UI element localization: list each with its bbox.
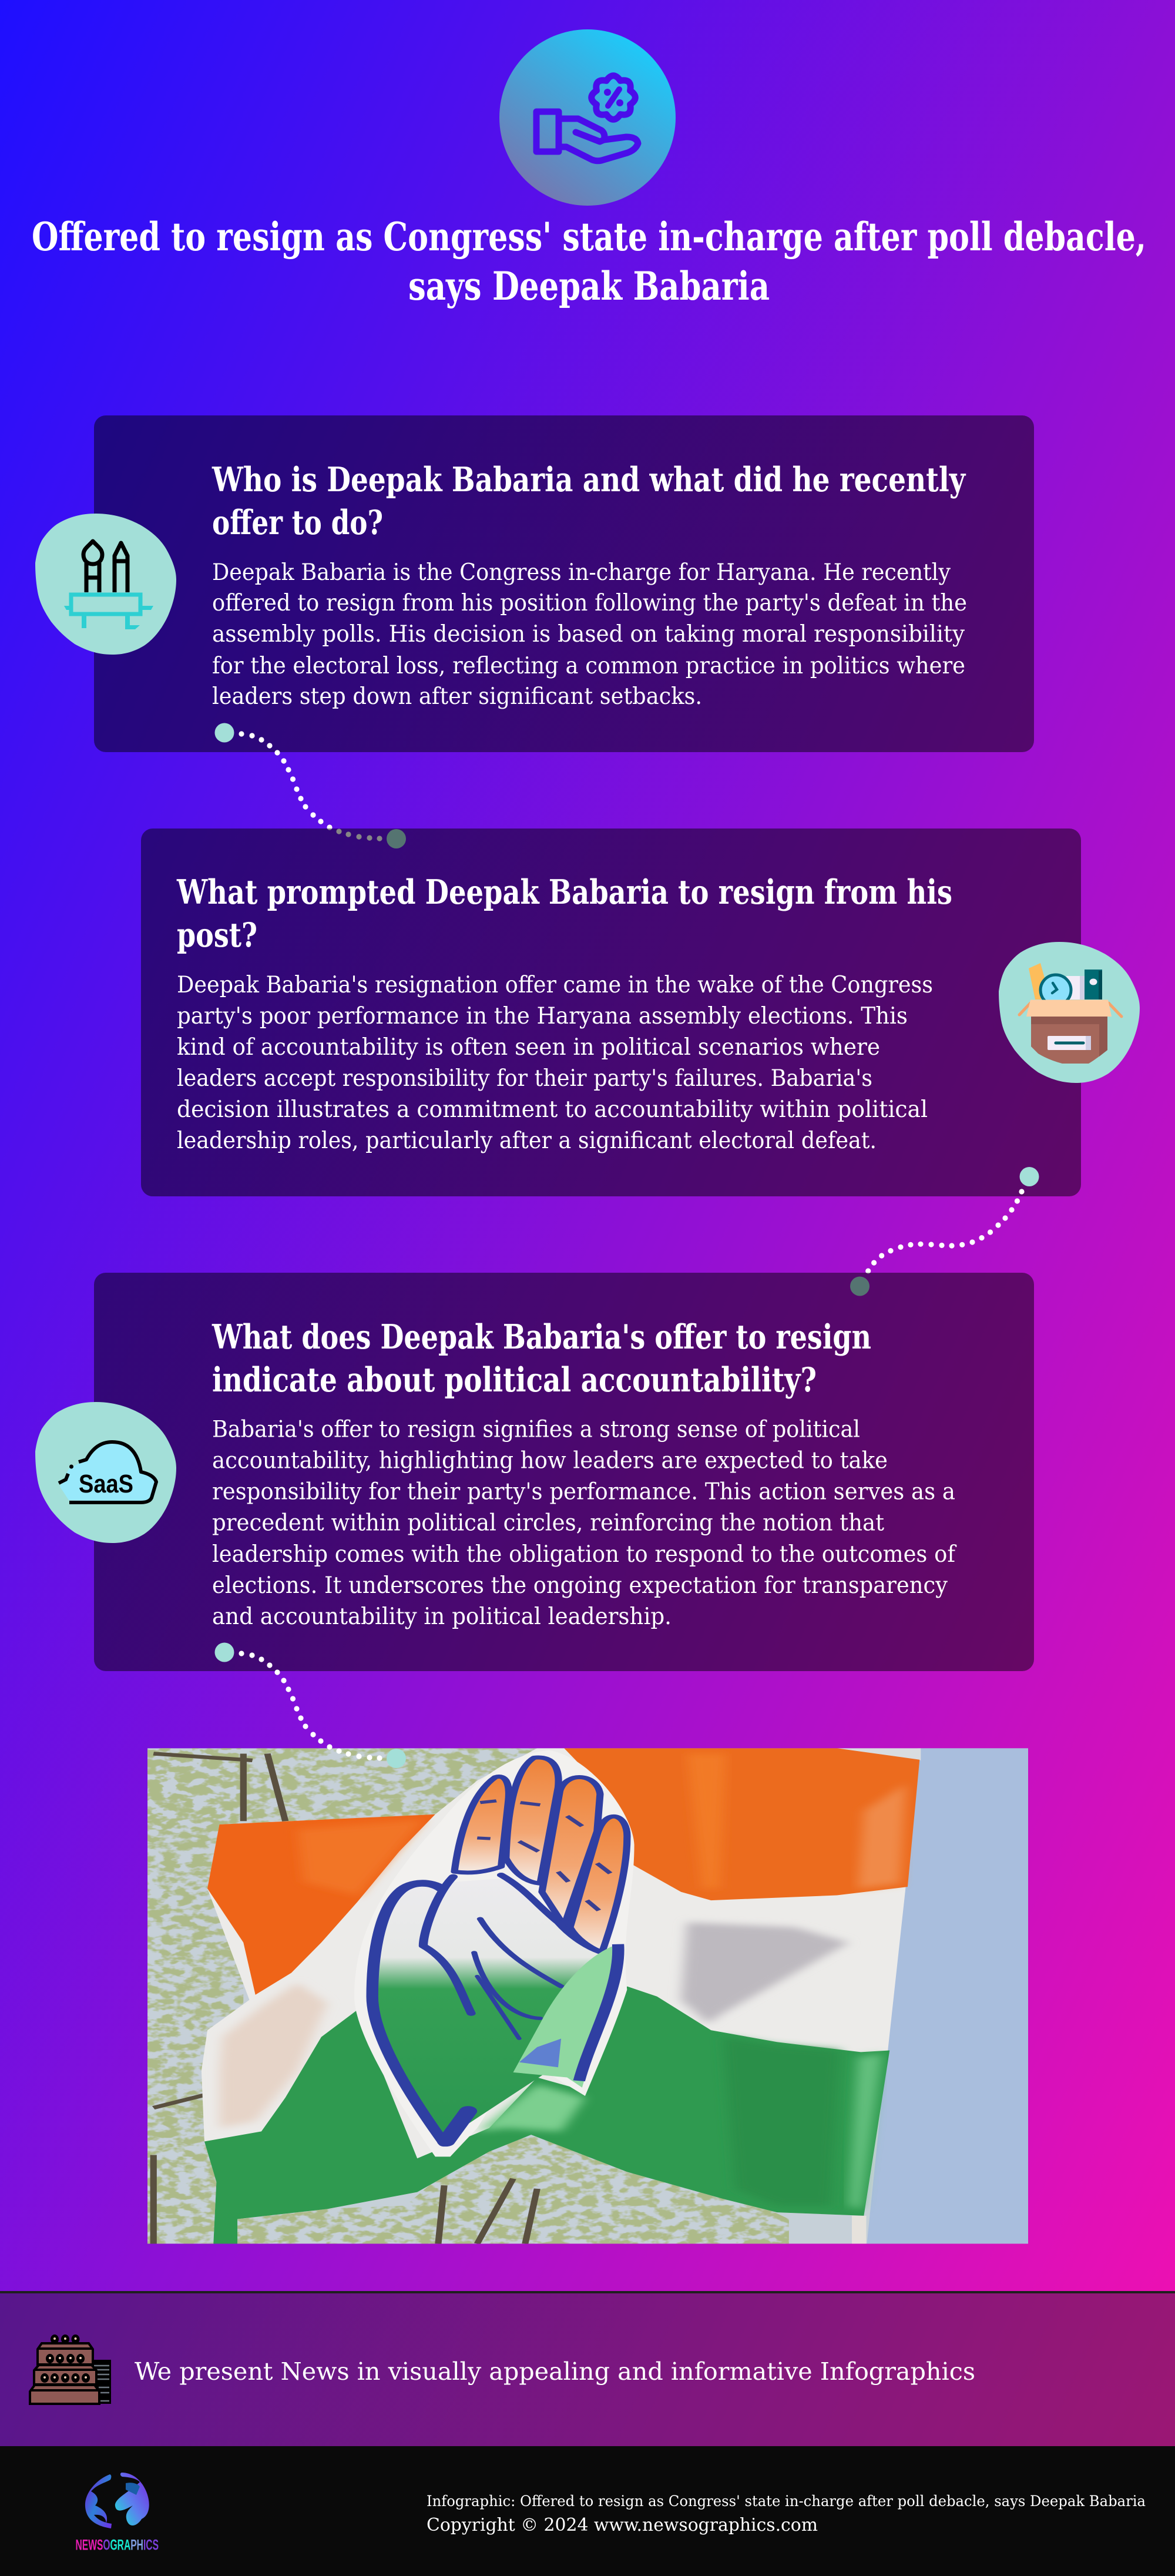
- connector: card 3 to photo: [215, 1643, 406, 1768]
- card 1 background: [94, 415, 1034, 752]
- card 1 heading: Who is Deepak Babaria and what did he recently: [212, 460, 966, 499]
- card 3 heading: What does Deepak Babaria's offer to resign: [212, 1317, 871, 1357]
- panel: what prompted the resignation: [141, 829, 1081, 1196]
- tagline banner: [0, 2291, 1175, 2446]
- card 1 body text: leaders step down after significant setbacks.: [212, 683, 702, 710]
- card 2 heading: What prompted Deepak Babaria to resign from his: [176, 873, 952, 912]
- card 1 heading: offer to do?: [212, 503, 383, 542]
- copyright text: Copyright © 2024 www.newsographics.com: [427, 2515, 818, 2535]
- icon: paint brush and pencil on stand: [35, 514, 176, 655]
- card 2 body text: leaders accept responsibility for their party's failures. Babaria's: [177, 1065, 872, 1092]
- flag white band: [202, 1748, 919, 2243]
- card 3 body text: [212, 1416, 957, 1630]
- logo: Newsographics: NEWSOGRAPHICS: [75, 2537, 159, 2554]
- card 2 heading: post?: [177, 915, 257, 955]
- card 2 body text: decision illustrates a commitment to accountability within political: [177, 1096, 928, 1123]
- card 2 body text: [177, 972, 933, 1154]
- tagline text: We present News in visually appealing and informative Infographics: [135, 2357, 975, 2386]
- card 2 body text: party's poor performance in the Haryana assembly elections. This: [177, 1003, 908, 1029]
- panel: who is Deepak Babaria: [94, 415, 1034, 752]
- card 2 heading: [176, 873, 952, 955]
- hand blue outline: [372, 1875, 603, 2143]
- footer: [0, 2446, 1175, 2576]
- card 1 body text: offered to resign from his position following the party's defeat in the: [212, 590, 967, 616]
- card 3 body text: Babaria's offer to resign signifies a strong sense of political: [212, 1416, 860, 1443]
- card 2 body text: Deepak Babaria's resignation offer came in the wake of the Congress: [177, 972, 933, 998]
- card 3 body text: elections. It underscores the ongoing expectation for transparency: [212, 1572, 948, 1599]
- fingers: [454, 1757, 627, 1953]
- wall behind flagpole: [867, 1748, 1028, 2243]
- hand symbol: [354, 1750, 634, 2156]
- card 3 body text: and accountability in political leadership.: [212, 1604, 672, 1630]
- card 3 background: [94, 1273, 1034, 1671]
- card 3 body text: precedent within political circles, reinforcing the notion that: [212, 1510, 884, 1536]
- icon: open box with clock and binder: [999, 942, 1140, 1083]
- title: says Deepak Babaria: [408, 263, 770, 309]
- card 3 heading: [212, 1317, 871, 1400]
- flag orange band: [564, 1748, 919, 1900]
- card 1 body text: Deepak Babaria is the Congress in-charge for Haryana. He recently: [212, 559, 951, 586]
- card 2 body text: leadership roles, particularly after a significant electoral defeat.: [177, 1128, 877, 1154]
- logo: Newsographics: [75, 2473, 159, 2554]
- card 1 body text: [212, 559, 967, 710]
- connector: card 1 to card 2: [215, 723, 406, 848]
- header icon: hand with discount badge: [499, 29, 676, 206]
- flagpole: [852, 2216, 866, 2243]
- card 2 body text: kind of accountability is often seen in political scenarios where: [177, 1034, 880, 1061]
- thumb over wrist: [513, 1944, 618, 2088]
- card 2 background: [141, 829, 1081, 1196]
- sky and trees: [147, 1748, 1028, 2243]
- icon: SaaS cloud: [35, 1402, 176, 1543]
- card 1 body text: assembly polls. His decision is based on taking moral responsibility: [212, 621, 965, 648]
- card 3 heading: indicate about political accountability?: [212, 1360, 817, 1400]
- icon: SaaS cloud: SaaS: [79, 1470, 133, 1498]
- hand white halo: [354, 1750, 634, 2156]
- icon: tiered seating with audience: [30, 2334, 111, 2404]
- card 3 body text: leadership comes with the obligation to respond to the outcomes of: [212, 1541, 957, 1568]
- palm: [372, 1879, 615, 2142]
- card 3 body text: responsibility for their party's performance. This action serves as a: [212, 1478, 955, 1505]
- card 1 body text: for the electoral loss, reflecting a common practice in politics where: [212, 653, 965, 679]
- card 1 heading: [212, 460, 966, 542]
- finger crease marks: [477, 1801, 610, 1910]
- card 3 body text: accountability, highlighting how leaders are expected to take: [212, 1448, 888, 1474]
- footer credit text: Infographic: Offered to resign as Congress' state in-charge after poll debacle, says Deepak Babaria: [427, 2493, 1146, 2510]
- photo: Congress party flag: [147, 1748, 1028, 2243]
- title: [32, 214, 1146, 309]
- panel: what the offer indicates: [94, 1273, 1034, 1671]
- connector: card 2 to card 3: [850, 1167, 1039, 1296]
- flag green band: [204, 1986, 889, 2243]
